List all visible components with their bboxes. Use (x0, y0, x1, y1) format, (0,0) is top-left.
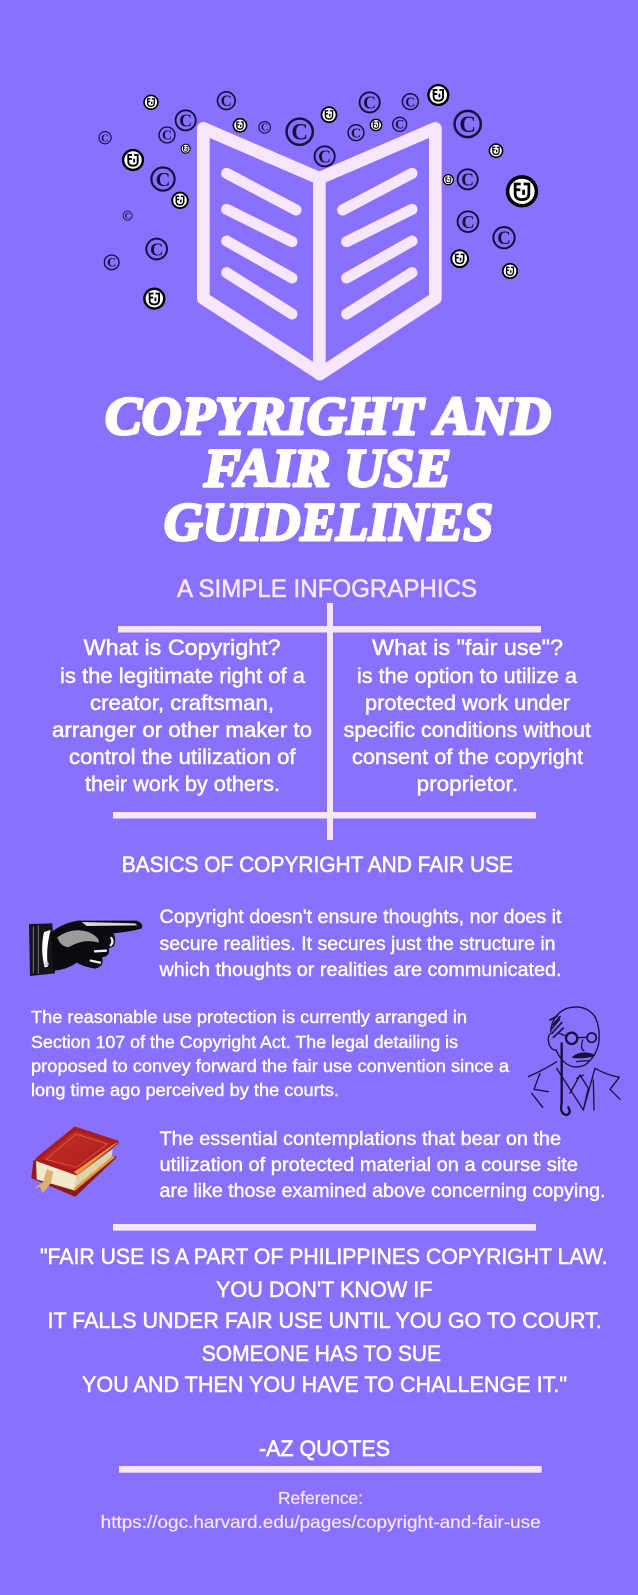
text block: what is copyright: creator, craftsman, (90, 692, 274, 715)
icon: scattered copyright symbols: C (221, 93, 232, 110)
icon: scattered copyright symbols: C (461, 169, 474, 189)
text block: reasonable use (31, 1007, 509, 1100)
quote (40, 1244, 608, 1397)
section heading: BASICS OF COPYRIGHT AND FAIR USE (122, 852, 513, 877)
icon: scattered copyright symbols: C (497, 228, 511, 249)
text block: copyright basics (158, 907, 562, 981)
title: COPYRIGHT AND (105, 386, 551, 446)
icon: scattered copyright symbols: C (150, 239, 163, 259)
text block: reasonable use: Section 107 of the Copyright Act. The legal detailing is (31, 1032, 458, 1052)
divider (119, 1466, 542, 1473)
reference: Reference: (278, 1488, 363, 1508)
icon: scattered copyright symbols: C (363, 92, 376, 112)
text block: reasonable use: long time ago perceived by the courts. (31, 1080, 339, 1100)
icon: scattered copyright symbols: C (351, 126, 361, 141)
text block: what is copyright (52, 635, 312, 796)
icon: scattered copyright symbols: C (461, 212, 474, 232)
icon: portrait of man with monocle (528, 1007, 620, 1115)
icon: scattered copyright symbols: C (107, 256, 116, 270)
text block: what is copyright: What is Copyright? (84, 635, 281, 660)
text block: what is copyright: is the legitimate right of a (60, 665, 305, 688)
text block: what is fair use: What is "fair use"? (372, 635, 563, 660)
icon: scattered copyright symbols: C (459, 112, 476, 137)
text block: copyright basics: Copyright doesn't ensure thoughts, nor does it (160, 907, 562, 928)
quote: YOU DON'T KNOW IF (216, 1277, 432, 1302)
quote attribution: -AZ QUOTES (259, 1436, 390, 1461)
text block: copyright basics: which thoughts or realities are communicated. (158, 960, 562, 981)
text block: what is fair use: is the option to utilize a (357, 665, 577, 688)
icon: scattered copyright symbols: C (261, 123, 268, 134)
icon: scattered copyright symbols (99, 92, 515, 270)
cross divider frame (113, 603, 541, 840)
icon: scattered copyright symbols: C (101, 133, 109, 144)
text block: copyright basics: secure realities. It secures just the structure in (160, 934, 556, 955)
subtitle: A SIMPLE INFOGRAPHICS (177, 575, 477, 603)
icon: scattered copyright symbols: C (405, 95, 415, 110)
text block: what is fair use: protected work under (365, 692, 570, 715)
quote: SOMEONE HAS TO SUE (202, 1341, 441, 1366)
text block: essential contemplations: The essential contemplations that bear on the (160, 1129, 561, 1150)
text block: what is fair use: consent of the copyright (352, 746, 583, 769)
icon: scattered copyright symbols: C (291, 120, 308, 145)
text block: essential contemplations: are like those examined above concerning copying. (160, 1181, 606, 1202)
icon: scattered copyright symbols: C (318, 146, 331, 166)
text block: what is fair use: specific conditions without (344, 719, 591, 742)
icon: scattered copyright symbols: C (156, 169, 170, 191)
icon: open book (203, 128, 435, 374)
quote: "FAIR USE IS A PART OF PHILIPPINES COPYRIGHT LAW. (40, 1244, 608, 1269)
title: GUIDELINES (164, 492, 493, 552)
reference: https://ogc.harvard.edu/pages/copyright-and-fair-use (101, 1512, 541, 1532)
text block: reasonable use: The reasonable use protection is currently arranged in (31, 1007, 467, 1027)
icon: red book (33, 1129, 118, 1195)
text block: what is fair use: proprietor. (417, 773, 518, 796)
text block: essential contemplations (160, 1129, 606, 1202)
reference (101, 1488, 541, 1532)
title: FAIR USE (203, 438, 451, 498)
title (105, 386, 551, 552)
text block: what is copyright: arranger or other maker to (52, 719, 312, 742)
text block: essential contemplations: utilization of protected material on a course site (160, 1155, 578, 1176)
text block: what is copyright: their work by others. (85, 773, 280, 796)
icon: scattered copyright symbols: C (162, 129, 172, 144)
icon: scattered copyright symbols: C (179, 110, 192, 130)
quote: IT FALLS UNDER FAIR USE UNTIL YOU GO TO COURT. (48, 1308, 602, 1333)
icon: scattered copyright symbols: C (395, 118, 404, 132)
text block: reasonable use: proposed to convey forward the fair use convention since a (31, 1056, 509, 1076)
text block: what is copyright: control the utilization of (69, 746, 296, 769)
divider (113, 1224, 536, 1231)
icon: scattered copyright symbols: C (125, 211, 131, 220)
quote: YOU AND THEN YOU HAVE TO CHALLENGE IT." (82, 1372, 567, 1397)
icon: scattered fair use symbols (123, 85, 536, 309)
icon: pointing hand (29, 921, 142, 976)
text block: what is fair use (344, 635, 591, 796)
